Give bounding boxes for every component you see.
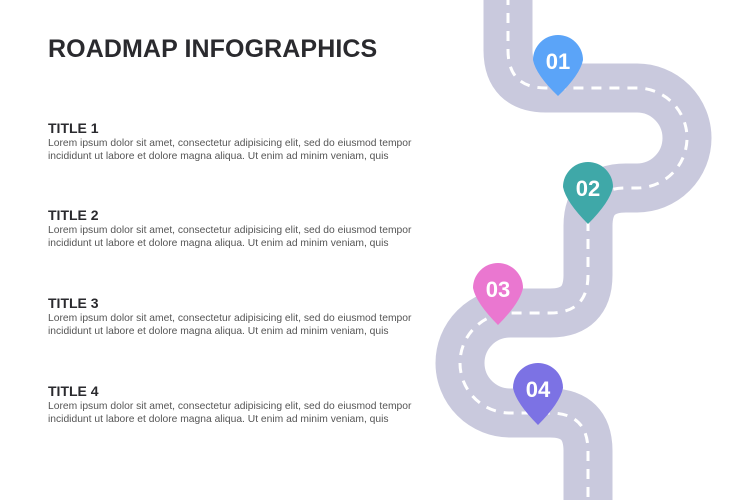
text block 3 xyxy=(48,295,412,336)
text block 2: Lorem ipsum dolor sit amet, consectetur adipisicing elit, sed do eiusmod tempor xyxy=(48,225,411,236)
text block 3: Lorem ipsum dolor sit amet, consectetur adipisicing elit, sed do eiusmod tempor xyxy=(48,313,411,324)
text block 3: incididunt ut labore et dolore magna aliqua. Ut enim ad minim veniam, quis xyxy=(48,326,389,336)
text block 1 xyxy=(48,120,412,162)
title: ROADMAP INFOGRAPHICS xyxy=(48,35,377,63)
pin 03 xyxy=(473,263,523,325)
pin 02: 02 xyxy=(576,176,600,201)
text block 2: TITLE 2 xyxy=(48,207,99,223)
pin 04 xyxy=(513,363,563,425)
text block 3: TITLE 3 xyxy=(48,295,99,311)
pin 01: 01 xyxy=(546,49,570,74)
text block 1: incididunt ut labore et dolore magna aliqua. Ut enim ad minim veniam, quis xyxy=(48,150,389,162)
text block 4 xyxy=(48,383,412,424)
text block 2 xyxy=(48,207,412,248)
text block 4: TITLE 4 xyxy=(48,383,99,399)
text block 4: Lorem ipsum dolor sit amet, consectetur adipisicing elit, sed do eiusmod tempor xyxy=(48,401,411,412)
road xyxy=(460,0,687,500)
text block 1: TITLE 1 xyxy=(48,120,99,136)
pin 01 xyxy=(533,35,583,96)
pin 04: 04 xyxy=(526,377,551,402)
text block 2: incididunt ut labore et dolore magna aliqua. Ut enim ad minim veniam, quis xyxy=(48,238,389,248)
text block 4: incididunt ut labore et dolore magna aliqua. Ut enim ad minim veniam, quis xyxy=(48,414,389,424)
text block 1: Lorem ipsum dolor sit amet, consectetur adipisicing elit, sed do eiusmod tempor xyxy=(48,138,411,149)
pin 03: 03 xyxy=(486,277,510,302)
pin 02 xyxy=(563,162,613,224)
